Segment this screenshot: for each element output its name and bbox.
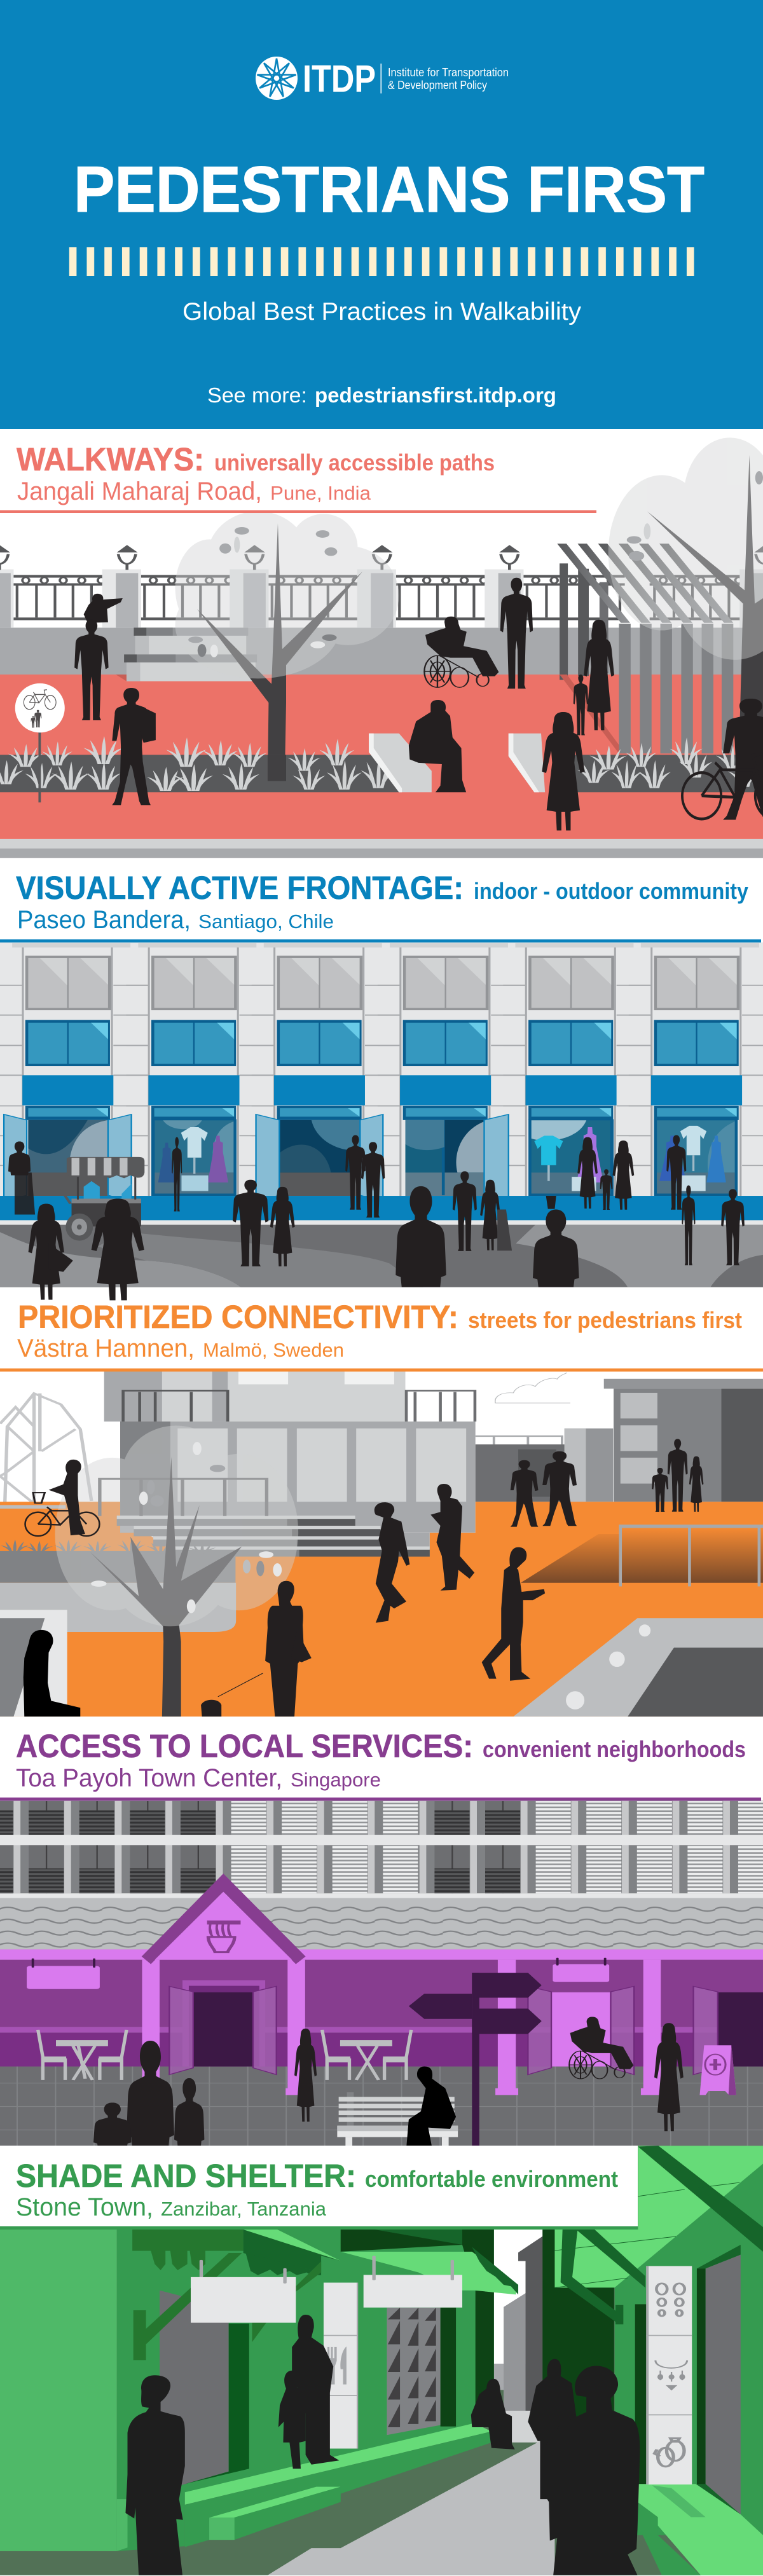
columns [142, 1960, 664, 2095]
tree canopy [175, 511, 399, 678]
icon: necklace [656, 2360, 687, 2390]
handrail [100, 1479, 266, 1516]
signpost [409, 1973, 542, 2148]
heading: frontage: VISUALLY ACTIVE FRONTAGE: [16, 870, 464, 906]
people [74, 578, 763, 830]
leaves [188, 471, 763, 657]
people [24, 1439, 703, 1716]
see more link: pedestriansfirst.itdp.org [315, 383, 556, 407]
upper storey [0, 1801, 763, 1898]
paving [0, 2067, 763, 2148]
left wall [0, 2230, 494, 2551]
see more link [207, 383, 556, 407]
woman walking [375, 1502, 409, 1623]
panel: access to local services [0, 1723, 763, 2148]
heading: walkways [0, 441, 596, 513]
man with phone [430, 1484, 474, 1591]
heading: services [0, 1723, 761, 1800]
jewelry sign with icons [646, 2266, 692, 2484]
pergola [557, 544, 733, 753]
people [93, 2017, 684, 2148]
heading: walkways: universally accessible paths [214, 449, 495, 476]
heading: walkways: Jangali Maharaj Road, [17, 477, 262, 505]
railing and sunken area [521, 1524, 763, 1586]
stairs [117, 1516, 430, 1557]
walkways scene [0, 437, 763, 858]
leaves [91, 1442, 282, 1613]
panel: walkways [0, 437, 763, 858]
planter and wall [0, 1551, 235, 1583]
see more link: See more: [207, 383, 307, 407]
shelter scene [0, 2146, 763, 2575]
title: PEDESTRIANS FIRST [74, 153, 705, 226]
heading: connectivity [0, 1299, 763, 1372]
tiled roof [0, 1898, 763, 1950]
icon: rings [654, 2438, 684, 2467]
icon: earrings [656, 2284, 685, 2316]
right wall and roof [542, 2146, 763, 2575]
hanging signs [191, 2256, 462, 2323]
people [8, 1135, 745, 1300]
woman with bag [265, 1581, 304, 1716]
heading: walkways: WALKWAYS: [17, 441, 204, 477]
lane [268, 2440, 554, 2575]
panel: prioritized connectivity [0, 1299, 763, 1716]
open doors [4, 1114, 509, 1202]
tree: right [647, 455, 763, 764]
services scene [0, 1801, 763, 2148]
pharmacy A-frame sign [700, 2045, 736, 2095]
greenhouse [0, 1394, 92, 1504]
benches [369, 734, 545, 792]
ITDP logo [256, 57, 509, 100]
heading: shelter: SHADE AND SHELTER: [16, 2158, 356, 2194]
heading: connectivity: streets for pedestrians first [468, 1307, 742, 1333]
icon: bike and pedestrian sign [15, 683, 65, 802]
hanging signs [27, 1958, 609, 1989]
pink door [528, 1986, 763, 2074]
man texting [482, 1547, 545, 1681]
wall niche [0, 1610, 67, 1716]
pool corner [513, 1618, 763, 1716]
header panel [0, 0, 763, 429]
heading: frontage: Santiago, Chile [198, 910, 334, 933]
frontage scene [0, 942, 763, 1300]
heading: shelter: Zanzibar, Tanzania [161, 2198, 327, 2220]
heading: shelter: comfortable environment [365, 2166, 618, 2192]
pavement and ground [0, 1196, 763, 1220]
heading: frontage: Paseo Bandera, [17, 906, 191, 934]
heading: connectivity: Västra Hamnen, [17, 1334, 195, 1362]
subtitle: Global Best Practices in Walkability [182, 298, 582, 325]
panel: visually active frontage [0, 858, 763, 1300]
ITDP logo: ITDP [303, 57, 376, 100]
cafe tables [38, 2030, 411, 2080]
heading: shelter [0, 2146, 638, 2230]
heading: services: Singapore [291, 1769, 381, 1791]
people [125, 2315, 640, 2575]
heading: frontage [0, 858, 761, 942]
step [209, 2487, 341, 2518]
sidewalk [185, 2423, 491, 2505]
food cart [61, 1157, 144, 1241]
shopfronts [4, 1114, 738, 1202]
tree [90, 1457, 242, 1716]
orange plaza [0, 1502, 763, 1716]
gable with noodle bowl icon [142, 1874, 306, 1964]
panel: shade and shelter [0, 2146, 763, 2575]
plants [0, 736, 761, 791]
planter beds [0, 755, 399, 792]
heading: connectivity: PRIORITIZED CONNECTIVITY: [18, 1299, 458, 1335]
bench [337, 2092, 458, 2148]
canopy [55, 1426, 298, 1626]
right tree canopy [608, 437, 763, 660]
doorway [169, 1980, 277, 2074]
heading: services: Toa Payoh Town Center, [16, 1764, 282, 1792]
buildings [104, 1371, 763, 1533]
heading: services: ACCESS TO LOCAL SERVICES: [16, 1728, 473, 1764]
dashed divider [69, 247, 694, 276]
mannequins [158, 1143, 175, 1182]
heading: shelter: Stone Town, [16, 2193, 153, 2221]
vent block window [387, 2308, 456, 2435]
connectivity scene [0, 1371, 763, 1716]
awnings [132, 2230, 518, 2360]
ITDP logo: & Development Policy [388, 79, 487, 92]
tree: left [197, 523, 362, 781]
heading: connectivity: Malmö, Sweden [203, 1339, 344, 1361]
restaurant sign with fork and knife icon [324, 2283, 358, 2449]
heading: walkways: Pune, India [270, 482, 371, 504]
door recess [160, 2291, 229, 2491]
fence and lamps [0, 545, 763, 627]
alley gap and back buildings [494, 2230, 544, 2442]
shopfront wall [0, 1949, 763, 1960]
ITDP logo: Institute for Transportation [388, 66, 509, 79]
cloud outline [495, 1373, 570, 1403]
steps [116, 627, 257, 682]
